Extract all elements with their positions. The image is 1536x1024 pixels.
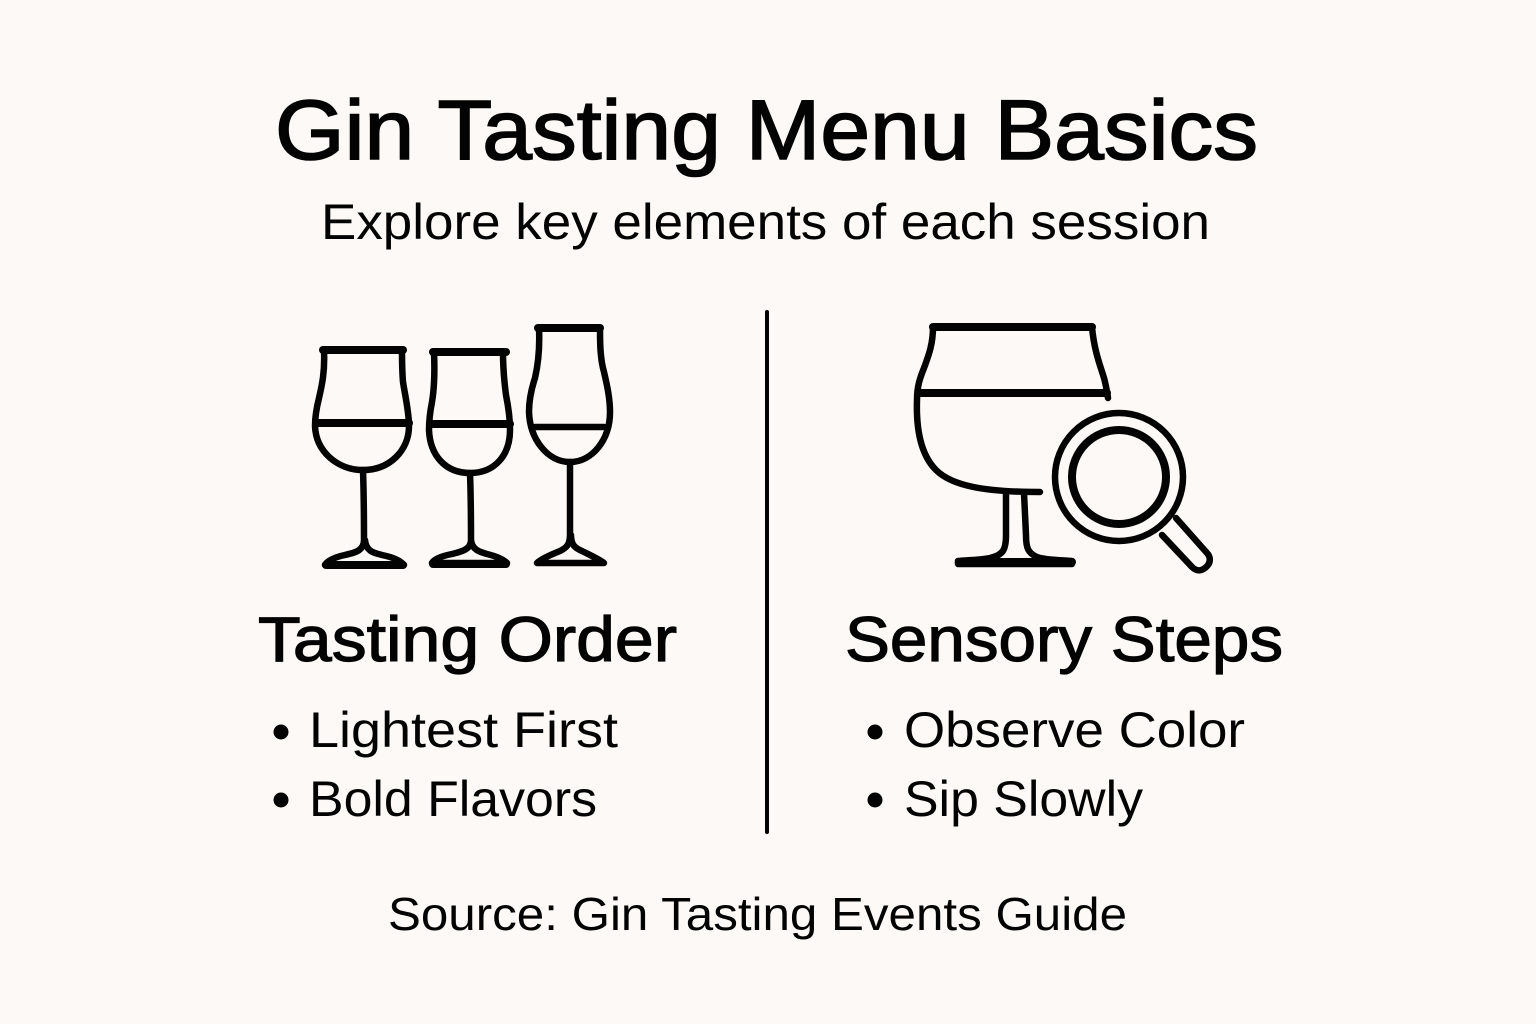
bullet list: tasting order	[274, 702, 618, 827]
icon: third glass	[529, 328, 610, 563]
bullet list: sensory steps: Observe Color	[904, 702, 1245, 758]
bullet list: tasting order: Bold Flavors	[309, 771, 597, 827]
source note: Source: Gin Tasting Events Guide	[388, 888, 1127, 940]
panel: sensory steps	[845, 327, 1283, 827]
subtitle: Explore key elements of each session	[321, 194, 1210, 250]
bullet list: sensory steps: Sip Slowly	[904, 771, 1143, 827]
bullet list: sensory steps	[868, 702, 1245, 827]
heading: tasting order: Tasting Order	[258, 605, 677, 675]
icon: snifter glass	[917, 327, 1108, 564]
panel: tasting order	[258, 328, 677, 827]
icon: three tasting glasses	[315, 328, 610, 565]
title: Gin Tasting Menu Basics	[275, 83, 1258, 177]
icon: first glass	[315, 350, 409, 565]
icon: glass with magnifier	[917, 327, 1210, 570]
bullet list: tasting order: Lightest First	[309, 702, 618, 758]
icon: second glass	[429, 352, 510, 564]
heading: sensory steps: Sensory Steps	[845, 605, 1283, 675]
icon: magnifying glass	[1055, 413, 1210, 570]
divider	[765, 310, 769, 834]
